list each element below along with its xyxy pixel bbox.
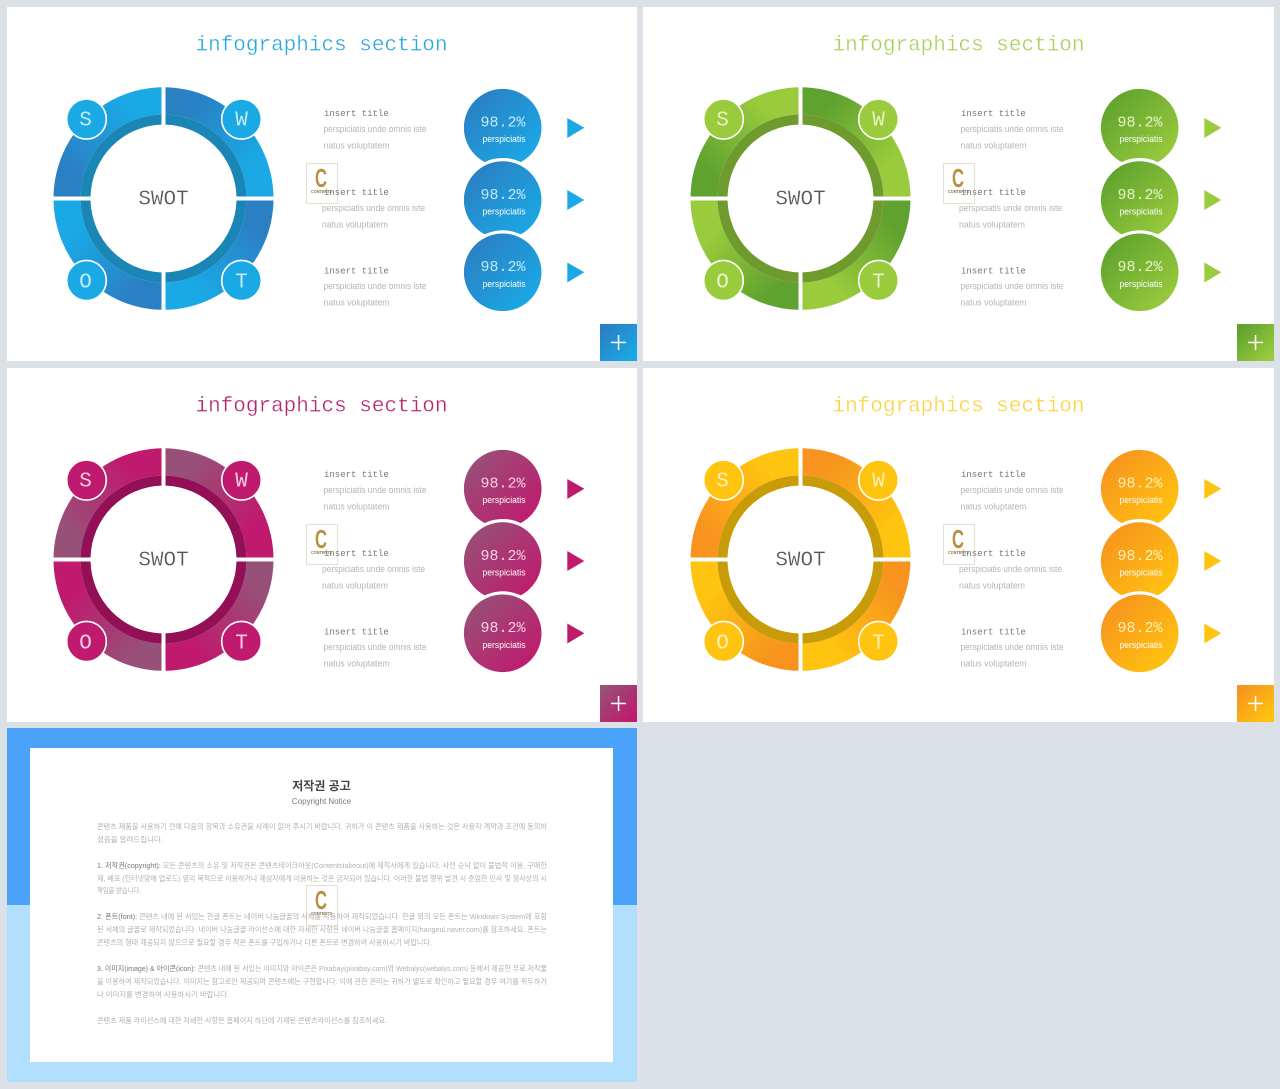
text block: license footer: 콘텐츠 제품 라이선스에 대한 자세한 사항은 홈페이지 하단에 기재된 콘텐츠라이선스를 참조하세요. xyxy=(97,1015,387,1025)
ring chart: blue: S xyxy=(79,109,92,133)
text block: row 2 xyxy=(322,549,425,592)
text block: intro xyxy=(97,821,547,844)
stat circles xyxy=(461,89,545,314)
arrows xyxy=(1204,479,1221,644)
text block: intro: 콘텐츠 제품을 사용하기 전에 다음의 항목과 소유권을 사례이 읽어 주시기 바랍니다. 귀하가 이 콘텐츠 제품을 사용하는 것은 사용자 계약과 조건에 동의하 xyxy=(97,821,547,831)
stat circles: 98.2% xyxy=(480,548,526,565)
text block: intro: 셨음을 알려드립니다. xyxy=(97,834,163,844)
text block: row 3: natus voluptatem xyxy=(960,658,1027,670)
ring chart: green: O xyxy=(716,270,729,295)
title: yellow: infographics section xyxy=(832,396,1085,418)
text block: row 1: perspiciatis unde omnis iste xyxy=(960,485,1064,496)
text block: row 2: natus voluptatem xyxy=(959,580,1025,592)
text block: row 3 xyxy=(324,266,426,308)
watermark: C xyxy=(315,524,327,554)
title: green: infographics section xyxy=(832,34,1085,58)
text block: font clause: 콘텐츠의 형태 제공되지 않으므로 필요할 경우 적은 폰트를 구입하거나 다른 폰트로 변경하여 사용하시기 바랍니다. xyxy=(97,937,432,947)
ring chart: green xyxy=(691,87,910,310)
ring chart: yellow: O xyxy=(716,631,729,656)
watermark: CONTENTS xyxy=(311,550,332,555)
text block: row 3: perspiciatis unde omnis iste xyxy=(324,642,426,653)
text block: row 2: insert title xyxy=(324,549,389,559)
stat circles: perspiciatis xyxy=(482,206,526,218)
ring chart: magenta: SWOT xyxy=(138,548,189,573)
ring chart: yellow: W xyxy=(872,470,885,494)
ring chart: yellow: SWOT xyxy=(775,548,826,573)
plus button xyxy=(1237,324,1274,361)
arrows xyxy=(1204,118,1221,282)
text block: row 1: natus voluptatem xyxy=(960,140,1027,152)
text block: row 1: insert title xyxy=(961,470,1026,480)
stat circles: 98.2% xyxy=(480,114,526,132)
text block: copyright clause: 1. 저작권(copyright): 모든 콘텐츠의 소유 및 저작권은 콘텐츠테이크아웃(Contentstakeout)에 제작사에게 있습니다. 사전 승낙 없이 불법적 이용, 구매한 xyxy=(97,860,547,870)
panel: blue SWOT xyxy=(7,7,637,361)
text block: font clause: 된 서체의 글꼴로 제작되었습니다. 네이버 나눔글꼴 라이선스에 대한 자세한 사항은 네이버 나눔글꼴 홈페이지(hangeul.naver.com)를 참조하세요. 폰트는 xyxy=(97,924,547,934)
subheading: Copyright Notice xyxy=(292,797,352,806)
ring chart: magenta: W xyxy=(235,470,248,494)
text block: row 1: perspiciatis unde omnis iste xyxy=(960,124,1064,135)
ring chart: magenta xyxy=(54,448,273,671)
ring chart: magenta: T xyxy=(235,631,248,656)
stat circles: perspiciatis xyxy=(1120,134,1163,145)
ring chart: blue: W xyxy=(235,109,248,133)
watermark: C xyxy=(952,163,964,193)
text block: row 2: perspiciatis unde omnis iste xyxy=(959,564,1062,575)
ring chart: blue: O xyxy=(79,270,92,295)
title: magenta: infographics section xyxy=(195,396,448,418)
watermark xyxy=(944,163,974,204)
text block: row 3: perspiciatis unde omnis iste xyxy=(324,281,426,292)
stat circles: perspiciatis xyxy=(482,279,526,290)
text block: row 2 xyxy=(959,188,1062,230)
text block: row 1: natus voluptatem xyxy=(960,502,1027,512)
ring chart: blue: T xyxy=(235,270,248,295)
text block: row 1: perspiciatis unde omnis iste xyxy=(324,124,426,135)
watermark: CONTENTS xyxy=(948,189,969,194)
ring chart: yellow: T xyxy=(872,631,885,656)
panel: yellow SWOT xyxy=(643,368,1274,722)
text block: row 1 xyxy=(324,470,426,512)
ring chart: magenta: S xyxy=(79,470,92,494)
stat circles: perspiciatis xyxy=(1120,568,1163,578)
stat circles xyxy=(1098,450,1182,675)
stat circles: 98.2% xyxy=(480,187,526,204)
stat circles: 98.2% xyxy=(480,620,526,637)
stat circles: perspiciatis xyxy=(482,495,526,506)
text block: copyright clause xyxy=(97,860,547,895)
watermark xyxy=(944,524,974,564)
text block: row 2: perspiciatis unde omnis iste xyxy=(959,203,1062,214)
text block: row 1 xyxy=(324,109,426,152)
text block: row 3: insert title xyxy=(324,266,389,276)
text block: row 3: perspiciatis unde omnis iste xyxy=(960,642,1064,653)
text block: image clause: 3. 이미지(image) & 아이콘(icon): 콘텐츠 내에 된 서있는 이미지와 아이콘은 Pixabay(pixabay.com)와 Webalys(webalys.com) 등에서 제공한 무료 저작물 xyxy=(97,963,547,973)
watermark: C xyxy=(315,163,327,193)
text block: row 1 xyxy=(960,109,1064,152)
panel: copyright notice xyxy=(7,728,637,1082)
text block: row 3 xyxy=(324,628,426,670)
text block: row 1: insert title xyxy=(324,470,389,480)
heading: copyright: 저작권 공고 xyxy=(292,778,351,793)
text block: row 2: insert title xyxy=(961,188,1026,198)
panel: green SWOT xyxy=(643,7,1274,361)
text block: row 1: natus voluptatem xyxy=(324,502,390,512)
stat circles: 98.2% xyxy=(1117,548,1163,565)
text block: row 1: insert title xyxy=(961,109,1026,119)
stat circles: 98.2% xyxy=(1117,476,1163,492)
text block: row 3 xyxy=(960,266,1064,308)
text block: row 3: perspiciatis unde omnis iste xyxy=(960,281,1064,292)
ring chart: green: SWOT xyxy=(775,187,826,212)
watermark: C xyxy=(315,885,327,915)
ring chart: green: T xyxy=(872,270,885,295)
stat circles: perspiciatis xyxy=(482,568,526,578)
text block: row 3: natus voluptatem xyxy=(324,658,390,670)
watermark: CONTENTS xyxy=(948,550,969,555)
text block: row 2: natus voluptatem xyxy=(322,580,388,592)
ring chart: green: S xyxy=(716,109,729,133)
text block: image clause xyxy=(97,963,547,999)
watermark: CONTENTS xyxy=(311,911,332,916)
ring chart: blue xyxy=(54,87,273,310)
text block: image clause: 을 이용하여 제작되었습니다. 이미지는 참고로만 제공되며 콘텐츠에는 구현합니다. 이에 관한 권리는 귀하가 별도로 확인하고 필요할 경우 여기를 위두하거 xyxy=(97,976,547,986)
text block: row 2: insert title xyxy=(961,549,1026,559)
text block: row 3: insert title xyxy=(324,628,389,638)
stat circles: perspiciatis xyxy=(1120,495,1163,506)
text block: row 2 xyxy=(959,549,1062,592)
title: blue: infographics section xyxy=(195,34,448,58)
stat circles: 98.2% xyxy=(1117,259,1163,276)
text block: row 2: perspiciatis unde omnis iste xyxy=(322,203,425,214)
ring chart: magenta: O xyxy=(79,631,92,656)
ring chart: green: W xyxy=(872,109,885,133)
text block: row 1 xyxy=(960,470,1064,512)
stat circles: 98.2% xyxy=(1117,114,1163,132)
stat circles: perspiciatis xyxy=(1120,206,1163,218)
text block: row 2: perspiciatis unde omnis iste xyxy=(322,564,425,575)
text block: image clause: 나 이미지를 변경하여 사용하시기 바랍니다. xyxy=(97,989,229,999)
arrows xyxy=(567,118,584,282)
stat circles: 98.2% xyxy=(480,476,526,492)
panel: magenta SWOT xyxy=(7,368,637,722)
text block: row 3: natus voluptatem xyxy=(324,298,390,308)
text block: row 1: perspiciatis unde omnis iste xyxy=(324,485,426,496)
watermark xyxy=(306,524,338,564)
text block: row 2: insert title xyxy=(324,188,389,198)
stat circles: perspiciatis xyxy=(1120,640,1163,651)
stat circles: perspiciatis xyxy=(482,640,526,651)
stat circles: 98.2% xyxy=(1117,620,1163,637)
watermark: C xyxy=(952,524,964,554)
watermark xyxy=(306,163,338,204)
stat circles: perspiciatis xyxy=(1120,279,1163,290)
plus button xyxy=(600,324,637,361)
text block: row 3: natus voluptatem xyxy=(960,298,1027,308)
text block: row 1: insert title xyxy=(324,109,389,119)
text block: font clause xyxy=(97,911,547,947)
text block: copyright clause: 책임을 받습니다. xyxy=(97,885,141,895)
stat circles: perspiciatis xyxy=(482,134,526,145)
text block: row 1: natus voluptatem xyxy=(324,140,390,152)
text block: row 2: natus voluptatem xyxy=(322,220,388,230)
text block: row 2: natus voluptatem xyxy=(959,220,1025,230)
text block: font clause: 2. 폰트(font): 콘텐츠 내에 된 서있는 한글 폰트는 네이버 나눔글꼴의 서체를 사용하여 제작되었습니다. 한글 외의 모든 폰트는 Windows System에 포함 xyxy=(97,911,547,921)
text block: row 3: insert title xyxy=(961,628,1026,638)
watermark xyxy=(306,885,338,926)
text block: row 2 xyxy=(322,188,425,230)
plus button xyxy=(1237,685,1274,722)
text block: row 3 xyxy=(960,628,1064,670)
stat circles xyxy=(1098,89,1182,314)
arrows xyxy=(567,479,584,644)
ring chart: blue: SWOT xyxy=(138,187,189,212)
stat circles: 98.2% xyxy=(480,259,526,276)
ring chart: yellow: S xyxy=(716,470,729,494)
plus button xyxy=(600,685,637,722)
watermark: CONTENTS xyxy=(311,189,332,194)
text block: row 3: insert title xyxy=(961,266,1026,276)
stat circles: 98.2% xyxy=(1117,187,1163,204)
text block: copyright clause: 제, 배포 (인터넷망에 업로드) 영리 목적으로 이용하거나 제삼자에게 이용하는 것은 금지되어 있습니다. 이러한 불법 행위 발견 시 준엄한 민사 및 형사상의 시 xyxy=(97,873,547,883)
stat circles xyxy=(461,450,545,675)
ring chart: yellow xyxy=(691,448,910,671)
